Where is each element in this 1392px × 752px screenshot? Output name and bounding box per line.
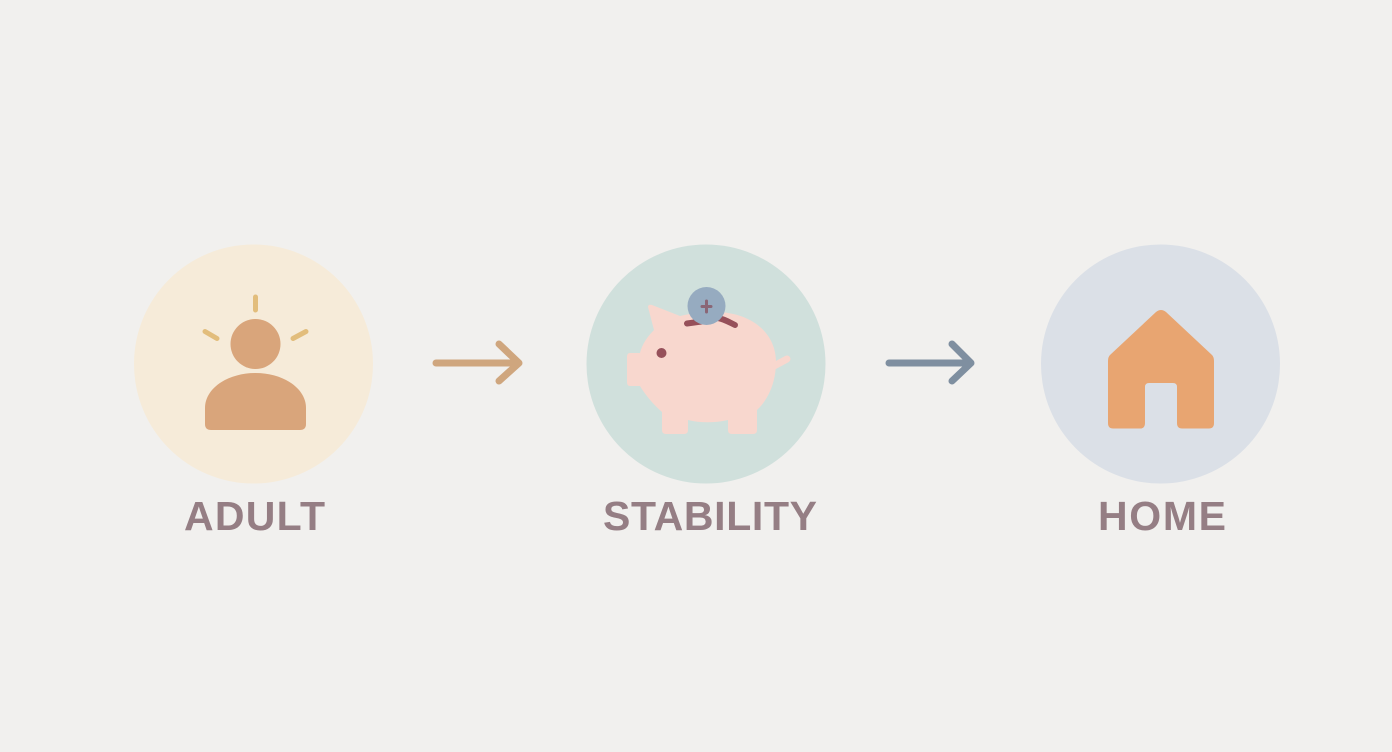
- label: HOME: HOME: [1098, 493, 1226, 539]
- icon: piggy bank: [627, 287, 787, 434]
- pig body: [627, 305, 776, 434]
- adult circle background: [134, 244, 373, 484]
- panel: stability step: [586, 244, 826, 539]
- coin slot: [687, 318, 735, 325]
- pig eye: [656, 348, 666, 358]
- stability circle background: [586, 244, 826, 484]
- arrow: stability to home: [889, 344, 971, 381]
- label: ADULT: ADULT: [184, 493, 325, 539]
- coin: [688, 287, 726, 325]
- panel: home step: [1041, 244, 1280, 539]
- icon: house: [1108, 310, 1214, 428]
- home circle background: [1041, 244, 1280, 484]
- label: STABILITY: STABILITY: [603, 493, 817, 539]
- pig tail: [774, 359, 787, 366]
- panel: adult step: [134, 244, 373, 539]
- arrow: adult to stability: [436, 344, 519, 381]
- coin mark: [702, 301, 711, 312]
- icon: adult person with rays: [205, 297, 306, 430]
